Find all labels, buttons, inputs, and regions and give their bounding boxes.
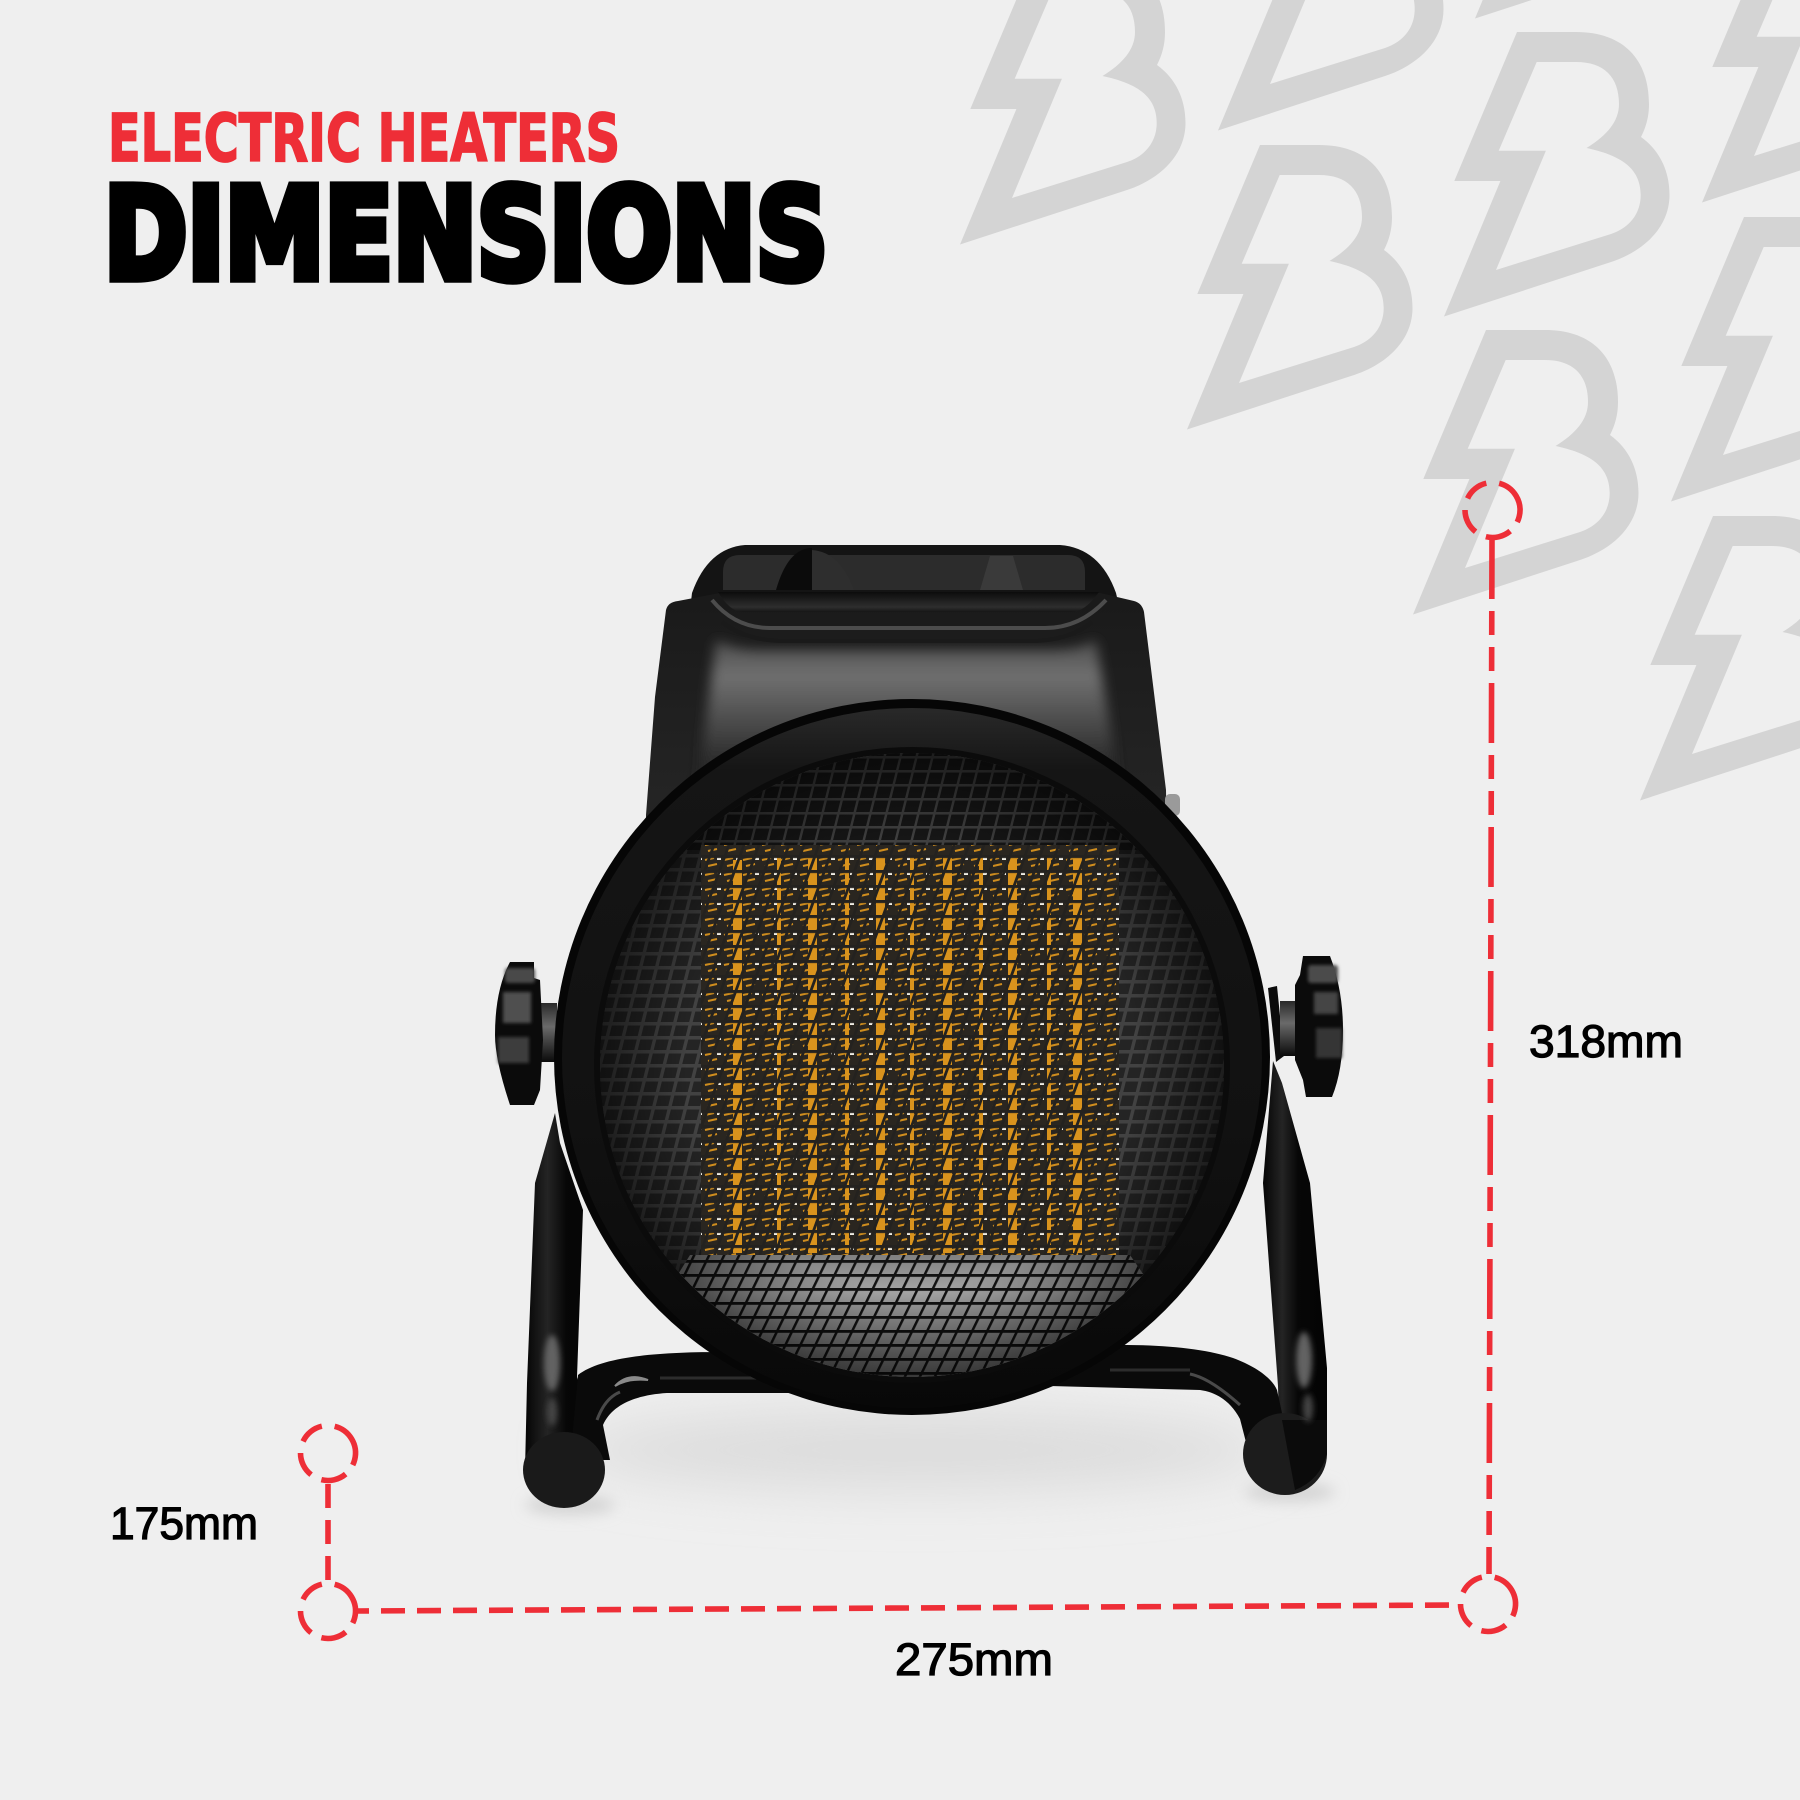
left knob [495, 962, 557, 1105]
wire mesh over element [701, 845, 1119, 1255]
title [104, 100, 828, 308]
orange heating stripes [733, 855, 1082, 1253]
base tube right [1050, 1345, 1290, 1450]
left leg [525, 1113, 600, 1470]
handle trough [718, 592, 1099, 612]
dimension lines [295, 477, 1526, 1644]
right bracket and knob [1268, 956, 1343, 1097]
background pattern: lightning B marks [960, 0, 1800, 800]
height dimension: 175mm [295, 1420, 361, 1644]
right foot [1243, 1332, 1327, 1495]
label: 275mm: 275mm [895, 1634, 1053, 1685]
grille side mesh [600, 753, 1224, 1377]
grille bottom vent [679, 1255, 1144, 1377]
width dimension: 275mm [357, 1571, 1521, 1637]
right leg [1263, 1061, 1327, 1460]
depth dimension: 318mm [1459, 477, 1526, 1574]
label: 175mm: 175mm [110, 1498, 258, 1549]
grille top mesh [686, 753, 1136, 850]
label: 318mm: 318mm [1529, 1016, 1683, 1067]
base tube left [570, 1352, 860, 1460]
body front panel [700, 638, 1116, 764]
front ring [554, 699, 1270, 1415]
heater illustration [495, 545, 1343, 1508]
heading: electric heaters: ELECTRIC HEATERS [108, 100, 620, 177]
floor shadow [525, 1410, 1335, 1515]
heating element [701, 845, 1119, 1255]
left foot [523, 1335, 605, 1508]
handle [690, 545, 1120, 610]
body housing [646, 597, 1180, 818]
grille edge shading [600, 753, 1224, 1377]
heading: dimensions: DIMENSIONS [104, 161, 828, 308]
